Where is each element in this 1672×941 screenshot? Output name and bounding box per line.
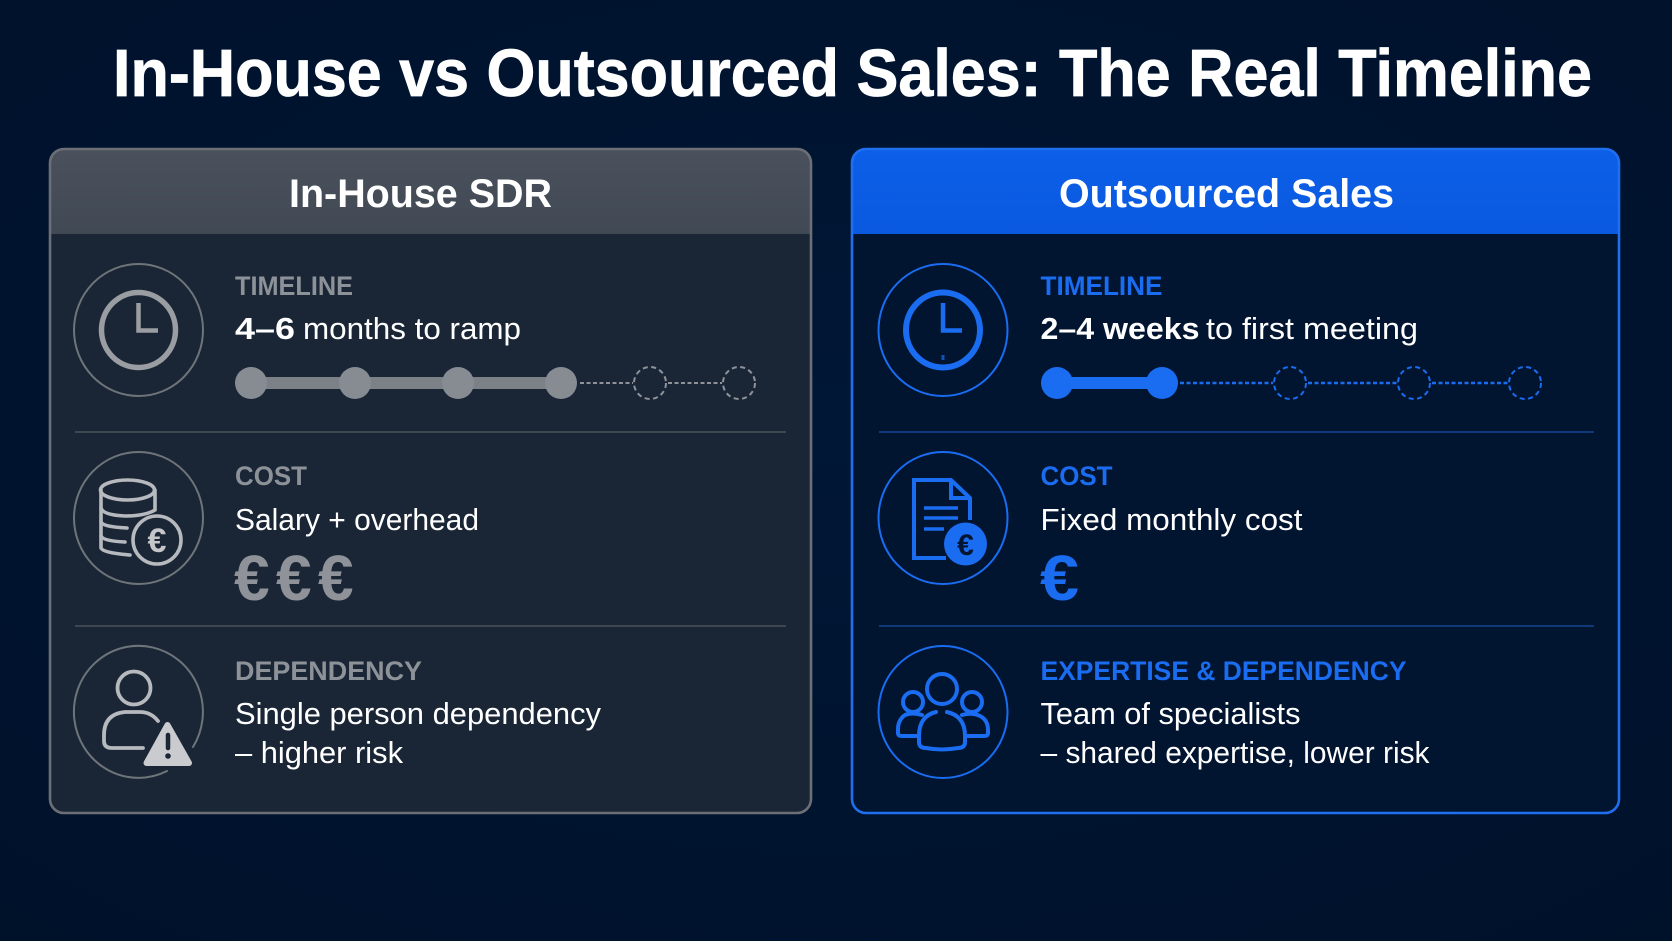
timeline progress: 2 of 5: [1041, 367, 1541, 399]
panel header: in-house: In-House SDR: [289, 172, 552, 216]
icon: coins grey: [74, 452, 203, 584]
title: In-House vs Outsourced Sales: The Real Timeline: [113, 36, 1592, 111]
dependency label: DEPENDENCY: [235, 656, 422, 686]
expertise label: EXPERTISE & DEPENDENCY: [1040, 656, 1406, 686]
icon: coins grey: €: [148, 522, 167, 560]
icon: clock grey: [74, 264, 203, 396]
timeline value: months to ramp: [303, 311, 521, 346]
cost value: Fixed monthly cost: [1040, 502, 1303, 537]
cost label: COST: [235, 461, 307, 491]
cost level: three euros: €€€: [234, 542, 354, 614]
panel header: outsourced: Outsourced Sales: [1059, 172, 1394, 216]
icon: invoice with euro: €: [957, 529, 974, 562]
expertise value: [1040, 696, 1430, 770]
icon: clock blue: [878, 264, 1008, 396]
timeline label: TIMELINE: [1040, 271, 1162, 301]
icon: team: [878, 646, 1008, 778]
cost value: Salary + overhead: [235, 502, 479, 537]
cost level: one euro: €: [1040, 542, 1079, 614]
timeline value: 2–4 weeks: [1040, 311, 1200, 346]
dependency value: [235, 696, 601, 770]
panel header: in-house: [50, 149, 811, 234]
panel: in-house SDR: [50, 149, 811, 813]
dependency value: – higher risk: [235, 735, 403, 770]
timeline progress: 4 of 6: [235, 367, 755, 399]
cost label: COST: [1040, 461, 1113, 491]
expertise value: Team of specialists: [1040, 696, 1300, 731]
dependency value: Single person dependency: [235, 696, 601, 731]
expertise value: – shared expertise, lower risk: [1040, 735, 1430, 770]
panel: outsourced sales: [852, 149, 1619, 813]
panel header: outsourced: [852, 149, 1619, 234]
icon: invoice with euro: [878, 452, 1008, 584]
timeline value: [1040, 311, 1418, 346]
timeline value: to first meeting: [1206, 311, 1418, 346]
icon: person with warning: [74, 646, 203, 778]
timeline value: 4–6: [235, 311, 295, 346]
timeline label: TIMELINE: [235, 271, 353, 301]
